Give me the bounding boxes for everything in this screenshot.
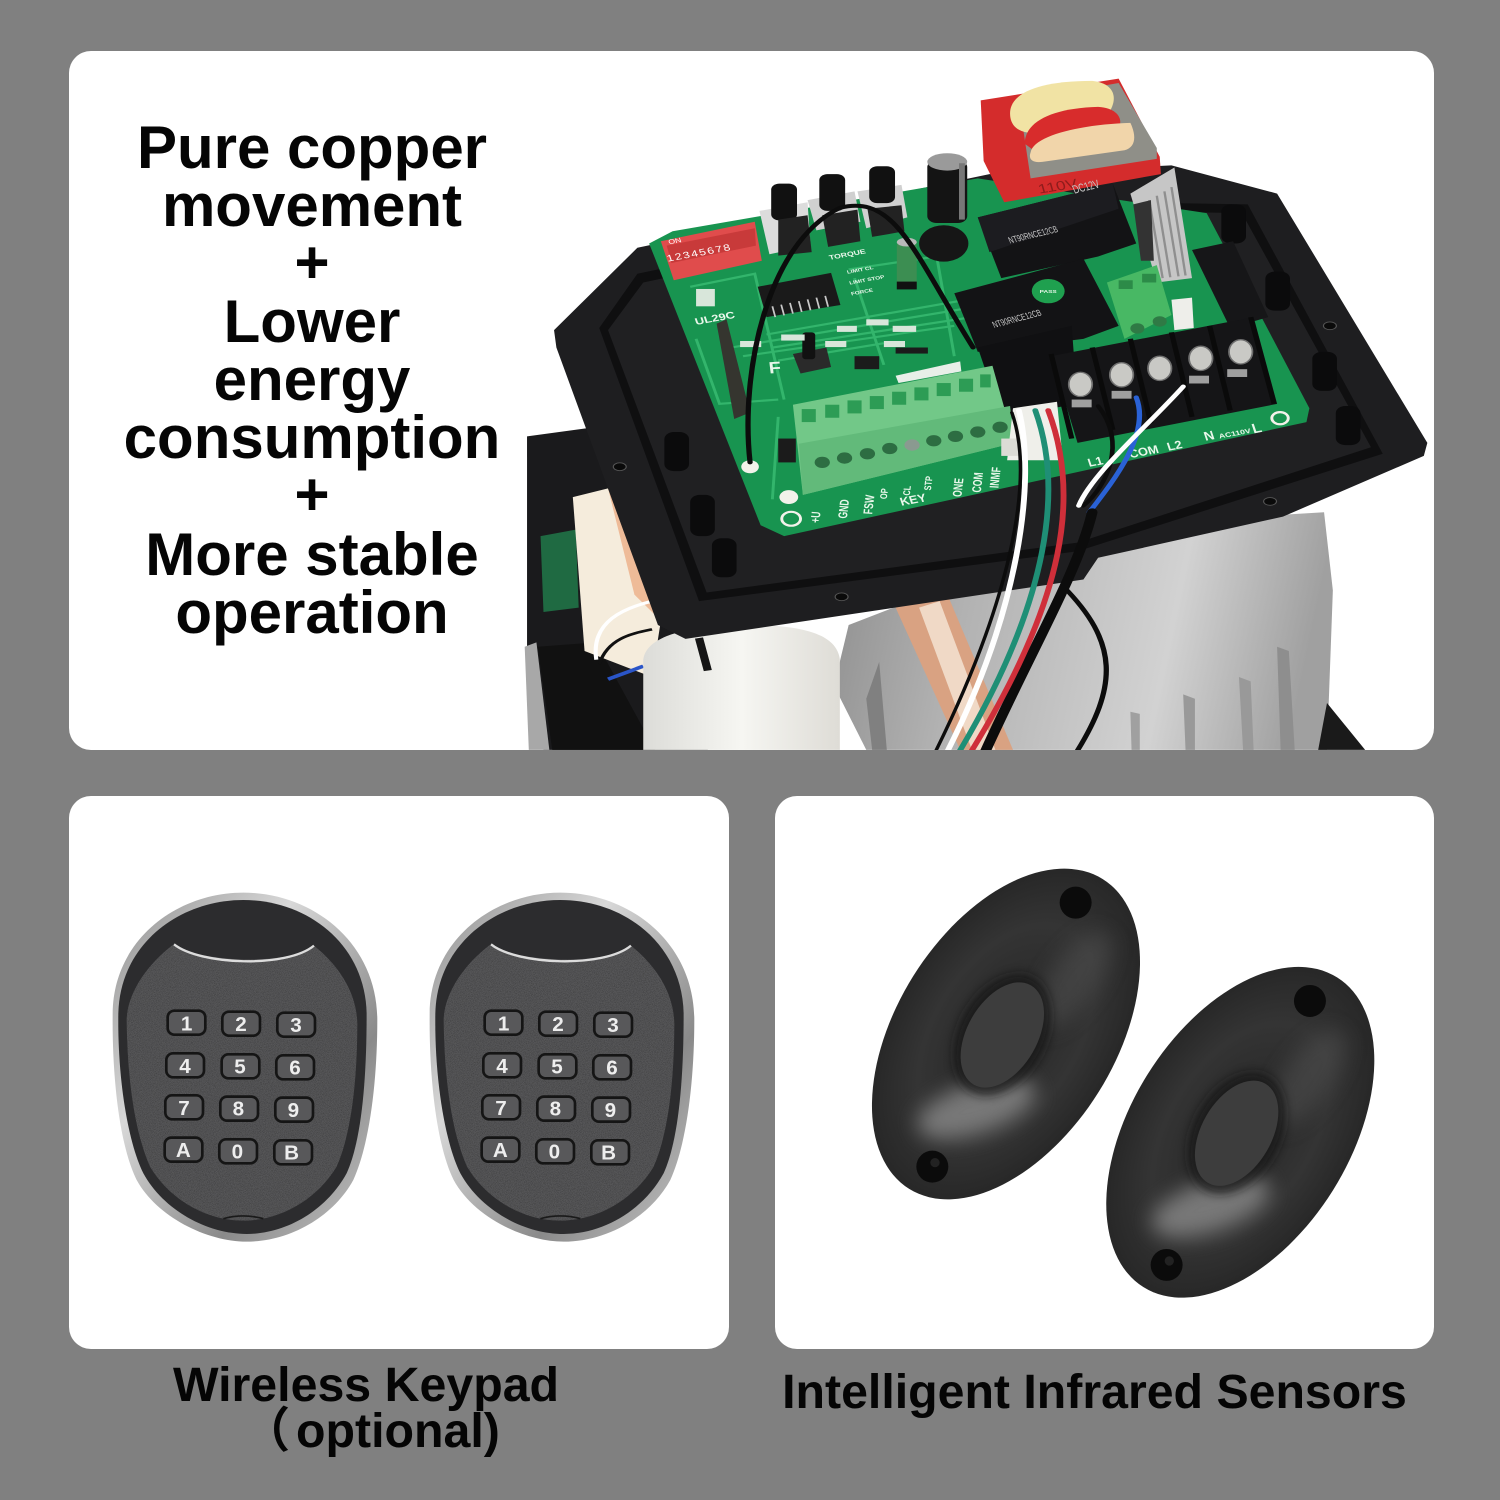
large green terminal block — [793, 366, 1014, 495]
wires — [748, 206, 1183, 755]
keypad left buttons: 2 — [235, 1013, 247, 1036]
board silkscreen text: LIMIT CL — [846, 266, 875, 275]
keypad left buttons: 0 — [232, 1141, 243, 1164]
keypad right buttons: 6 — [606, 1057, 618, 1080]
DIP switch — [661, 222, 762, 280]
board traces — [690, 256, 972, 499]
motor housing — [834, 512, 1365, 750]
black fuse connector — [1192, 241, 1268, 328]
SMD components — [696, 289, 916, 347]
board mounting holes — [741, 412, 1288, 526]
sensor right — [1051, 919, 1430, 1345]
text: copper movement benefits: + — [294, 229, 330, 296]
panel: infrared sensors — [775, 796, 1434, 1349]
keypad left — [113, 893, 377, 1242]
board silkscreen text: ONE — [951, 478, 967, 497]
caption: wireless keypad — [173, 1358, 559, 1458]
text: copper movement benefits: operation — [175, 579, 449, 646]
keypad right buttons: 9 — [605, 1099, 616, 1122]
green circuit board — [649, 178, 1309, 536]
small green terminal — [1107, 265, 1194, 339]
board silkscreen text: INMF — [988, 466, 1004, 489]
keypad left buttons: 5 — [234, 1056, 246, 1079]
electrolytic capacitors — [897, 153, 967, 289]
keypad right buttons: A — [493, 1139, 508, 1162]
keypad right buttons: 0 — [549, 1141, 560, 1164]
radio module — [716, 320, 746, 419]
caption: wireless keypad: Wireless Keypad — [173, 1358, 559, 1412]
product photo: gate motor with control board — [525, 79, 1427, 755]
keypad left buttons: 8 — [233, 1098, 244, 1121]
SMD chips — [778, 348, 928, 462]
screw terminal block — [1051, 317, 1277, 443]
keypad right — [430, 893, 694, 1242]
heat sink — [1130, 168, 1192, 282]
potentiometers — [759, 166, 907, 256]
keypad left buttons: 6 — [289, 1057, 301, 1080]
board silkscreen text: L1 — [1086, 454, 1105, 469]
keypad right buttons: 7 — [495, 1097, 507, 1120]
board silkscreen text: KEY — [898, 491, 928, 508]
board silkscreen text: F — [768, 359, 782, 377]
board silkscreen text: STP — [922, 476, 935, 491]
text: copper movement benefits: movement — [162, 172, 462, 239]
caption: wireless keypad: （ — [242, 1404, 290, 1458]
keypad left buttons: 3 — [290, 1014, 302, 1037]
keypad right buttons: 4 — [496, 1055, 508, 1078]
board silkscreen text: GND — [836, 499, 853, 519]
keypad left buttons: 4 — [179, 1055, 191, 1078]
board silkscreen text: L — [1250, 421, 1264, 437]
keypad left buttons: 7 — [178, 1097, 190, 1120]
keypad left buttons: B — [284, 1141, 299, 1164]
text: copper movement benefits: consumption — [124, 404, 500, 471]
keypad left buttons: 1 — [181, 1012, 192, 1035]
DIP switch: 12345678 — [665, 242, 733, 264]
white wire connector — [1001, 402, 1063, 460]
board silkscreen text: COM — [1127, 443, 1161, 461]
keypad right buttons: 3 — [607, 1014, 619, 1037]
board silkscreen text — [694, 248, 1264, 523]
keypad right buttons: 2 — [552, 1013, 564, 1036]
keypad right buttons: B — [601, 1141, 616, 1164]
IC pins — [772, 296, 828, 317]
text: copper movement benefits: More stable — [145, 521, 479, 588]
board silkscreen text: CL — [901, 485, 913, 496]
board silkscreen text: COM — [970, 472, 987, 493]
text: copper movement benefits: + — [294, 461, 330, 528]
board silkscreen text: UL29C — [694, 310, 737, 327]
plate screw holes — [613, 322, 1336, 601]
DIP switch: ON — [667, 236, 682, 246]
sensor left — [816, 821, 1195, 1247]
board silkscreen text: AC110V — [1218, 427, 1253, 440]
lower relay: NT90RNCE12CB — [991, 308, 1043, 330]
plate pegs — [664, 204, 1360, 577]
caption: wireless keypad: optional) — [296, 1404, 500, 1458]
text: copper movement benefits: Lower — [224, 288, 400, 355]
text: copper movement benefits — [124, 114, 500, 646]
board silkscreen text: FSW — [862, 494, 878, 515]
board silkscreen text: FORCE — [850, 288, 874, 297]
panel: control board — [69, 51, 1434, 755]
text: copper movement benefits: Pure copper — [137, 114, 487, 181]
board silkscreen text: +U — [809, 511, 824, 523]
board silkscreen text: OP — [878, 488, 890, 499]
keypad left buttons: A — [176, 1139, 191, 1162]
keypad right buttons: 8 — [550, 1098, 561, 1121]
text: copper movement benefits: energy — [214, 346, 411, 413]
red transformer: 110V — [1036, 177, 1080, 197]
mounting plate — [554, 165, 1427, 639]
upper relay: NT90RNCE12CB — [1007, 224, 1060, 246]
white header — [896, 361, 961, 383]
upper relay — [978, 179, 1136, 278]
panel: wireless keypads — [69, 796, 729, 1349]
IC chip — [758, 273, 840, 317]
keypad left buttons: 9 — [288, 1099, 299, 1122]
board silkscreen text: LIMIT STOP — [849, 275, 886, 286]
upper relay: DC12V — [1071, 179, 1102, 197]
keypad right buttons: 5 — [551, 1056, 563, 1079]
red transformer — [981, 79, 1161, 202]
board silkscreen text: L2 — [1165, 438, 1184, 453]
push button — [793, 332, 831, 374]
rear housing — [525, 428, 708, 750]
board silkscreen text: N — [1202, 428, 1216, 443]
keypad right buttons — [482, 1011, 632, 1164]
capacitor — [643, 625, 840, 750]
keypad left buttons — [165, 1011, 315, 1164]
lower relay: PASS — [1040, 290, 1057, 295]
caption: infrared sensors: Intelligent Infrared Sensors — [782, 1365, 1407, 1419]
buzzer — [919, 225, 968, 262]
lower relay — [954, 259, 1119, 417]
board silkscreen text: TORQUE — [828, 248, 867, 262]
keypad right buttons: 1 — [498, 1012, 509, 1035]
